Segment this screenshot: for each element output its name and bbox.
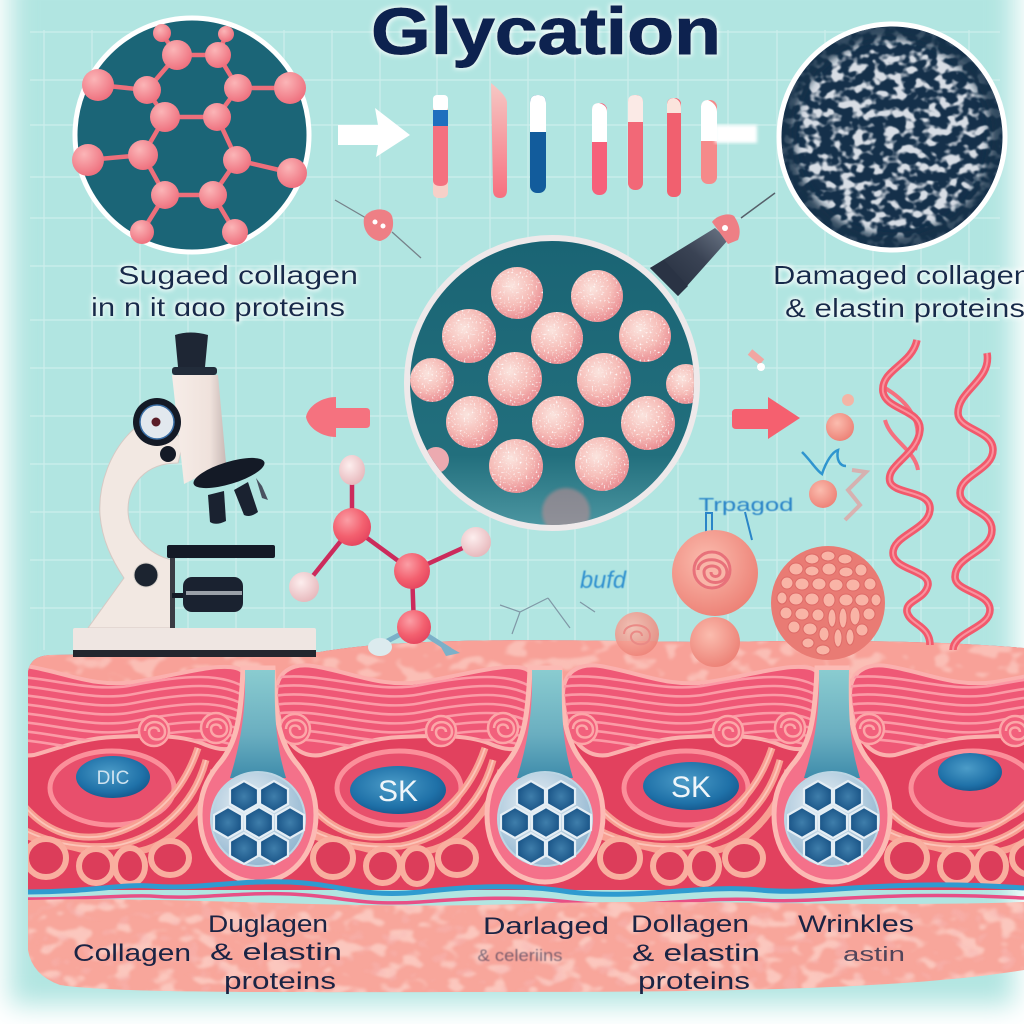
label: damaged collagen: Damaged collagen: [773, 260, 1024, 290]
label: sugared collagen: [91, 260, 358, 322]
small particles right: [750, 352, 866, 520]
arrow: pink left: [306, 397, 370, 437]
skin follicle: centre: [487, 668, 603, 882]
small molecule top centre: [335, 200, 421, 258]
skin follicle: left: [200, 668, 316, 882]
bottom label: dollagen & elastin proteins: & elastin: [632, 940, 760, 967]
skin tissue: top surface and base: [28, 635, 1024, 890]
oval badge: left: [76, 756, 150, 798]
bottom label: duglagen & elastin proteins: [208, 911, 342, 995]
microscope eyepiece: [175, 332, 208, 367]
bottom label: dollagen & elastin proteins: [631, 911, 760, 995]
brain-like protein cluster: [771, 546, 885, 660]
microscope base shadow: [73, 650, 316, 657]
label: damaged collagen: [773, 260, 1024, 323]
label: damaged collagen: & elastin proteins: [785, 293, 1024, 323]
oval badge: SK centre: [350, 766, 446, 814]
blurry label: centre bottom: [500, 567, 627, 634]
oval badge: SK right: SK: [671, 771, 711, 804]
blurry label: centre bottom: bufd: [580, 567, 627, 594]
oval badge: far right: [938, 753, 1002, 791]
bottom label: damaged: [478, 913, 609, 965]
panel: damaged collagen circle: [779, 24, 1005, 250]
bottom label: collagen: Collagen: [73, 940, 191, 967]
microscope nosepiece: [190, 452, 268, 494]
bottom label: wrinkles: astin: [843, 944, 905, 966]
bottom label: duglagen & elastin proteins: Duglagen: [208, 911, 328, 938]
bottom label: damaged: Darlaged: [483, 913, 609, 940]
oval badge: SK right: [643, 762, 739, 810]
bottom label: damaged: & celeriins: [478, 946, 562, 965]
panel: sugared collagen molecule circle: [72, 18, 309, 252]
bottom label: dollagen & elastin proteins: proteins: [638, 968, 750, 995]
icon: microscope: [73, 332, 316, 652]
cell spheres: [410, 267, 706, 493]
blurry label: centre right: Trpagod: [698, 495, 794, 515]
label: sugared collagen: in n it ɑɑo proteins: [91, 292, 345, 322]
microscope knobs: [160, 446, 176, 462]
molecular nodes: [72, 24, 307, 245]
microscope base: [73, 628, 316, 652]
skin follicle: right: [774, 668, 890, 882]
test tubes row: [433, 83, 757, 198]
magnifier handle: [650, 193, 775, 296]
molecular bonds: [88, 34, 292, 232]
molecule model: [289, 455, 491, 656]
microscope tube: [172, 375, 226, 484]
microscope pillar and arm: [88, 415, 184, 628]
arrow: pink right: [732, 397, 800, 439]
oval badge: left: DIC: [97, 768, 129, 789]
microscope objectives: [208, 491, 226, 524]
microscope dial: [133, 398, 181, 446]
bottom label: dollagen & elastin proteins: Dollagen: [631, 911, 749, 938]
bottom label: wrinkles: Wrinkles: [798, 911, 914, 938]
bottom label: duglagen & elastin proteins: proteins: [224, 968, 336, 995]
blue membrane lines: [28, 882, 1024, 905]
bottom label: wrinkles: [798, 911, 914, 966]
blurry label: centre right: [698, 495, 794, 540]
bottom label: duglagen & elastin proteins: & elastin: [210, 939, 342, 966]
collagen lobes: [0, 665, 1024, 884]
microscope stage: [167, 545, 275, 558]
wavy protein strands: [883, 340, 993, 650]
skin lower layer: [28, 895, 1024, 995]
arrow: white top: [338, 108, 410, 157]
spiral growths on skin: [615, 530, 758, 667]
label: sugared collagen: Sugaed collagen: [118, 260, 358, 290]
oval badge: SK centre: SK: [378, 775, 418, 808]
panel: magnified cell circle: [407, 238, 706, 536]
